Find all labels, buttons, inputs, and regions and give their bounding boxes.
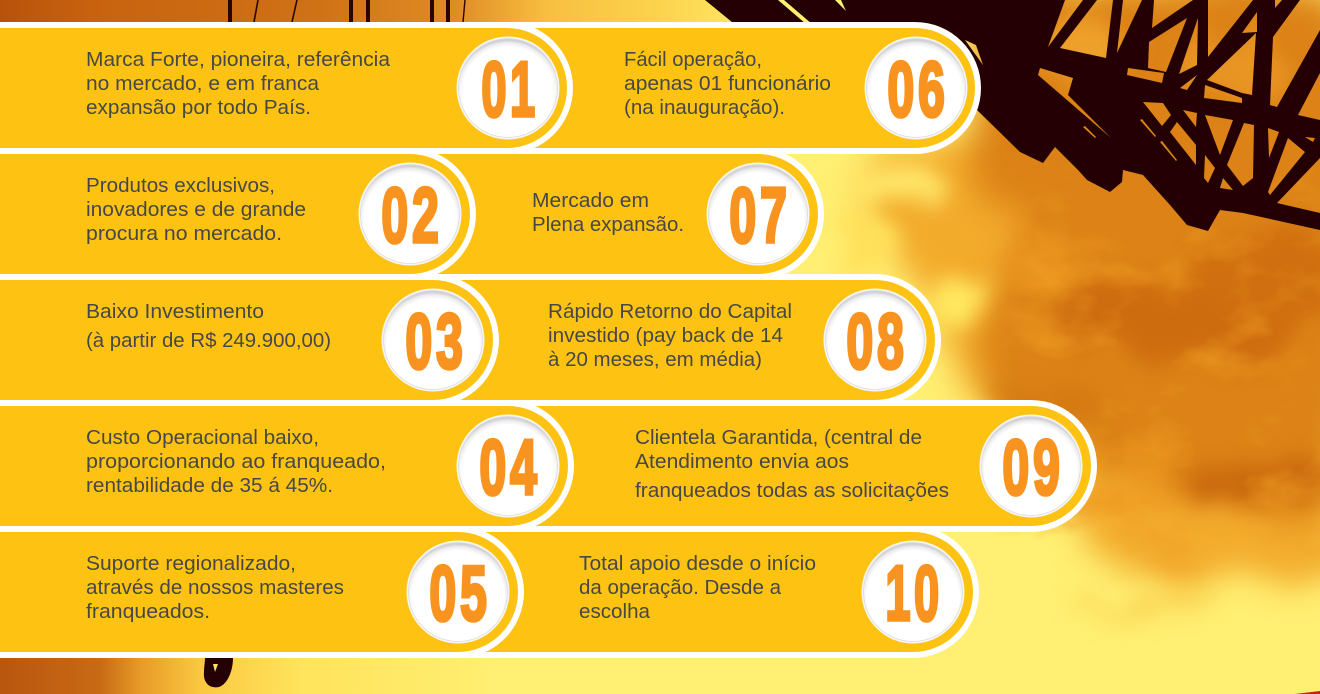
crane truss silhouette [705, 0, 1320, 231]
item 01: 01 [481, 45, 539, 133]
item 03: Baixo Investimento [86, 301, 264, 323]
item 05: através de nossos masteres [86, 577, 344, 599]
item 01: Marca Forte, pioneira, referência [86, 49, 391, 71]
item 03 [0, 274, 499, 406]
row 1 [0, 22, 981, 154]
item 06: apenas 01 funcionário [624, 73, 831, 95]
row 2 [0, 148, 824, 280]
item 08 [0, 274, 941, 406]
row 4 [0, 400, 1097, 532]
item 02: inovadores e de grande [86, 199, 306, 221]
item 02: Produtos exclusivos, [86, 175, 275, 197]
item 04 [0, 400, 574, 532]
item 04: rentabilidade de 35 á 45%. [86, 475, 333, 497]
item 06: 06 [887, 45, 949, 133]
item 05: Suporte regionalizado, [86, 553, 296, 575]
item 06: Fácil operação, [624, 49, 762, 71]
item 01: no mercado, e em franca [86, 73, 320, 95]
item 04: proporcionando ao franqueado, [86, 451, 386, 473]
item 07: Mercado em [532, 190, 649, 212]
item 01 [0, 22, 573, 154]
item 02 [0, 148, 476, 280]
item 08: investido (pay back de 14 [548, 325, 783, 347]
item 09: franqueados todas as solicitações [635, 480, 949, 502]
item 07: 07 [729, 171, 791, 259]
item 09: 09 [1002, 423, 1064, 511]
crane top cables [230, 0, 465, 22]
crane hook at bottom [204, 658, 233, 687]
item 10: da operação. Desde a [579, 577, 782, 599]
item 04: 04 [479, 423, 541, 511]
item 01: expansão por todo País. [86, 97, 311, 119]
row 3 [0, 274, 941, 406]
item 09 [0, 400, 1097, 532]
item 02: 02 [381, 171, 443, 259]
item 10: Total apoio desde o início [579, 553, 816, 575]
item 06 [0, 22, 981, 154]
row 5 [0, 526, 979, 658]
item 03: 03 [405, 297, 467, 385]
item 04: Custo Operacional baixo, [86, 427, 319, 449]
item 08: Rápido Retorno do Capital [548, 301, 792, 323]
item 08: 08 [846, 297, 908, 385]
item 07: Plena expansão. [532, 214, 684, 236]
item 10: 10 [885, 549, 943, 637]
item 03: (à partir de R$ 249.900,00) [86, 330, 331, 352]
item 07 [0, 148, 824, 280]
item 09: Clientela Garantida, (central de [635, 427, 922, 449]
item 09: Atendimento envia aos [635, 451, 849, 473]
item 05 [0, 526, 524, 658]
item 06: (na inauguração). [624, 97, 785, 119]
item 02: procura no mercado. [86, 223, 282, 245]
item 05: 05 [429, 549, 491, 637]
item 10: escolha [579, 601, 651, 623]
item 10 [0, 526, 979, 658]
item 05: franqueados. [86, 601, 210, 623]
item 08: à 20 meses, em média) [548, 349, 762, 371]
